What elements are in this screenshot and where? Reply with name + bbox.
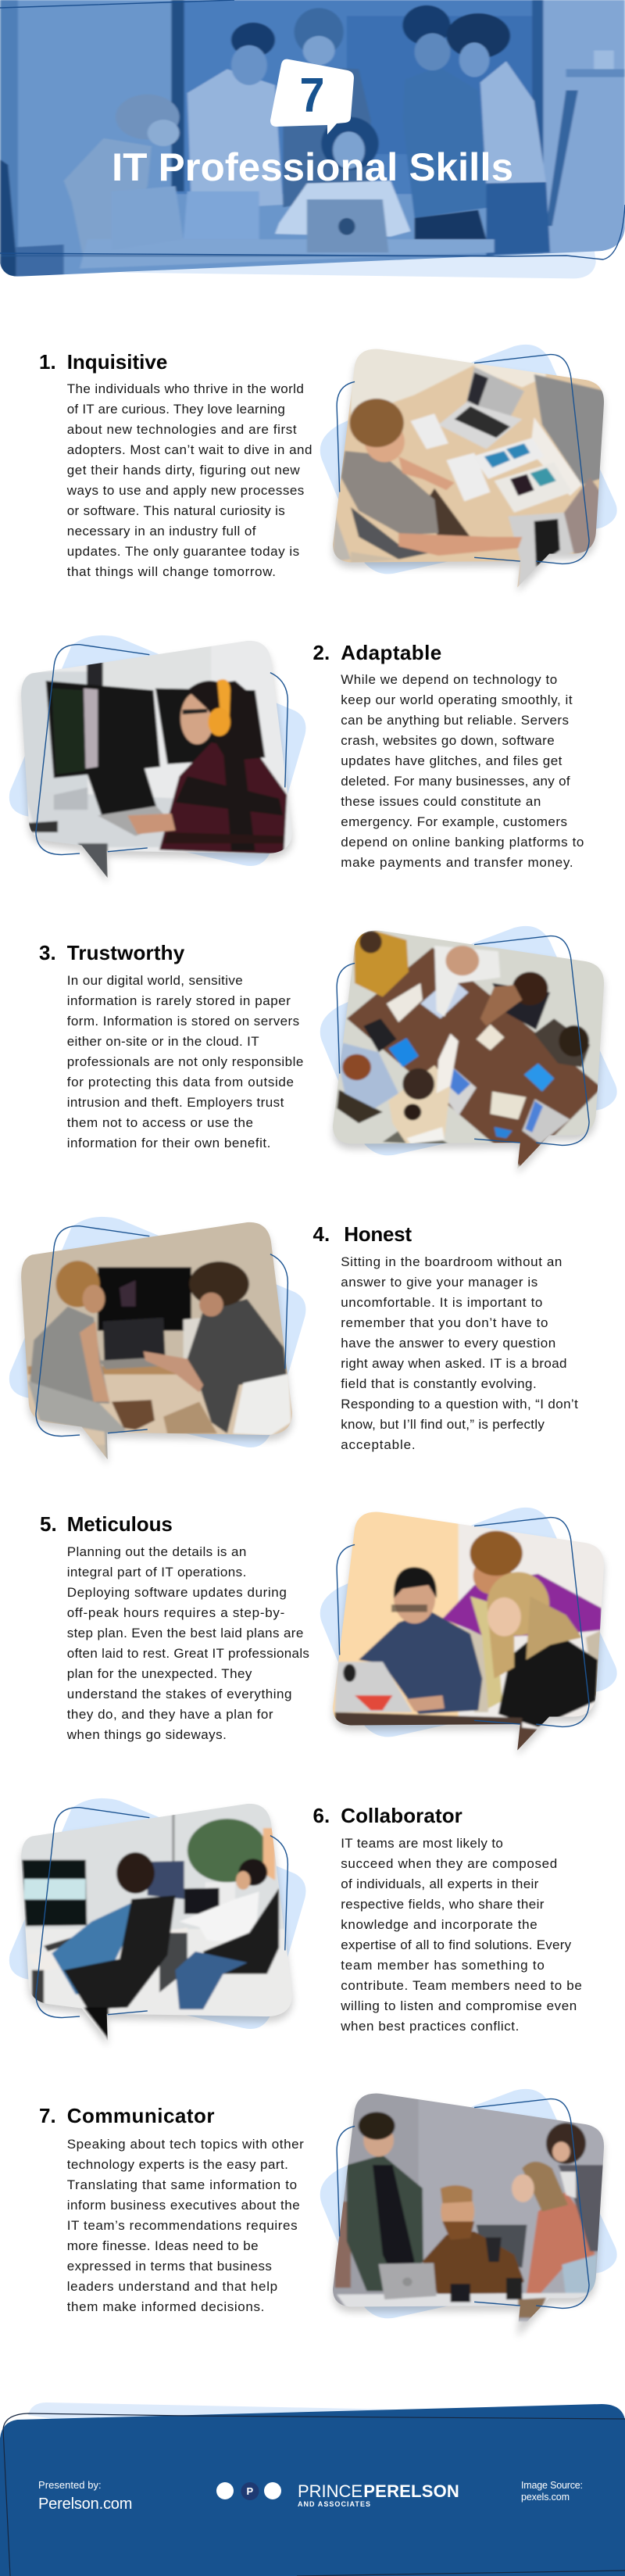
body 3: professionals are not only responsible xyxy=(67,1054,303,1069)
body 6 xyxy=(340,1836,582,2034)
body 2: can be anything but reliable. Servers xyxy=(341,713,569,728)
body 6: respective fields, who share their xyxy=(341,1897,545,1912)
logo: Prince Perelson and Associates xyxy=(216,2481,459,2508)
body 4: Sitting in the boardroom without an xyxy=(341,1254,562,1269)
body 7 xyxy=(67,2137,304,2314)
heading 2: Adaptable xyxy=(341,641,441,664)
body 3: information is rarely stored in paper xyxy=(67,993,291,1008)
body 7: technology experts is the easy part. xyxy=(67,2157,288,2172)
body 4: Responding to a question with, “I don’t xyxy=(341,1397,578,1411)
photo bubble 6 xyxy=(9,1798,305,2046)
body 2: emergency. For example, customers xyxy=(341,814,567,829)
heading 5: 5. xyxy=(40,1512,57,1536)
icon: number speech bubble: 7 xyxy=(300,69,325,123)
panel: 6 Collaborator xyxy=(9,1798,582,2046)
body 1: updates. The only guarantee today is xyxy=(67,544,299,559)
heading 5: Meticulous xyxy=(67,1512,173,1536)
body 5: often laid to rest. Great IT professionals xyxy=(67,1646,309,1661)
heading 4: 4. xyxy=(312,1222,330,1246)
body 5: Deploying software updates during xyxy=(67,1585,287,1600)
panel: 1 Inquisitive xyxy=(39,345,617,593)
heading 6: 6. xyxy=(312,1804,330,1827)
body 2: depend on online banking platforms to xyxy=(341,835,584,850)
body 3: for protecting this data from outside xyxy=(67,1075,294,1089)
body 4 xyxy=(341,1254,578,1452)
body 2: updates have glitches, and files get xyxy=(341,753,562,768)
photo bubble 2 xyxy=(9,634,305,883)
body 1 xyxy=(66,381,312,579)
body 1: ways to use and apply new processes xyxy=(66,483,304,498)
body 5: they do, and they have a plan for xyxy=(67,1707,273,1722)
body 1: or software. This natural curiosity is xyxy=(67,503,285,518)
body 7: inform business executives about the xyxy=(67,2198,300,2213)
panel: 7 Communicator xyxy=(39,2088,617,2337)
body 5: understand the stakes of everything xyxy=(67,1687,291,1701)
body 2: keep our world operating smoothly, it xyxy=(341,692,573,707)
body 5: step plan. Even the best laid plans are xyxy=(67,1626,303,1640)
body 6: willing to listen and compromise even xyxy=(340,1998,577,2013)
panel: 4 Honest xyxy=(9,1217,578,1467)
body 4: acceptable. xyxy=(341,1437,416,1452)
body 6: IT teams are most likely to xyxy=(341,1836,503,1851)
body 2: make payments and transfer money. xyxy=(341,855,573,870)
body 6: knowledge and incorporate the xyxy=(341,1917,538,1932)
body 5 xyxy=(66,1544,309,1742)
body 2: deleted. For many businesses, any of xyxy=(341,774,570,789)
icon: number speech bubble xyxy=(270,59,354,134)
body 3: information for their own benefit. xyxy=(67,1136,270,1150)
heading 1: Inquisitive xyxy=(67,350,167,374)
body 1: The individuals who thrive in the world xyxy=(67,381,304,396)
body 2 xyxy=(341,672,584,870)
panel: 5 Meticulous xyxy=(40,1507,617,1755)
body 7: IT team’s recommendations requires xyxy=(67,2218,298,2233)
presented by text: Presented by: xyxy=(38,2479,102,2491)
heading 7: 7. xyxy=(39,2104,56,2127)
heading 3: Trustworthy xyxy=(67,941,185,964)
body 4: uncomfortable. It is important to xyxy=(341,1295,542,1310)
body 3: form. Information is stored on servers xyxy=(67,1014,299,1029)
heading 3: 3. xyxy=(39,941,56,964)
body 4: right away when asked. IT is a broad xyxy=(341,1356,567,1371)
header banner xyxy=(0,0,625,282)
body 5: integral part of IT operations. xyxy=(67,1565,246,1580)
heading 2: 2. xyxy=(312,641,330,664)
body 7: Translating that same information to xyxy=(67,2177,297,2192)
body 6: succeed when they are composed xyxy=(341,1856,557,1871)
logo: Prince Perelson and Associates: P xyxy=(247,2485,253,2497)
presented by text xyxy=(38,2479,132,2513)
body 6: expertise of all to find solutions. Every xyxy=(341,1937,572,1952)
heading 6: Collaborator xyxy=(341,1804,462,1827)
presented by text: Perelson.com xyxy=(38,2496,132,2513)
body 7: leaders understand and that help xyxy=(67,2279,277,2294)
body 1: about new technologies and are first xyxy=(67,422,297,437)
photo bubble 3 xyxy=(320,925,617,1175)
body 6: contribute. Team members need to be xyxy=(341,1978,582,1993)
body 1: of IT are curious. They love learning xyxy=(67,402,285,417)
body 5: plan for the unexpected. They xyxy=(67,1666,252,1681)
photo bubble 7 xyxy=(320,2088,617,2337)
panel: 3 Trustworthy xyxy=(39,925,617,1175)
photo bubble 5 xyxy=(320,1507,617,1755)
body 3 xyxy=(67,973,303,1150)
body 3: In our digital world, sensitive xyxy=(67,973,243,988)
body 1: get their hands dirty, figuring out new xyxy=(67,463,300,478)
image source text: pexels.com xyxy=(521,2492,570,2503)
heading 1: 1. xyxy=(39,350,56,374)
footer light blue backing xyxy=(28,2402,438,2423)
logo: Prince Perelson and Associates: PRINCE xyxy=(298,2481,362,2501)
photo bubble 1 xyxy=(320,345,617,593)
image source text: Image Source: xyxy=(521,2480,583,2491)
body 4: field that is constantly evolving. xyxy=(341,1376,537,1391)
body 4: have the answer to every question xyxy=(341,1336,555,1351)
body 6: when best practices conflict. xyxy=(340,2019,519,2034)
body 4: answer to give your manager is xyxy=(341,1275,538,1290)
body 7: Speaking about tech topics with other xyxy=(67,2137,304,2152)
footer outline stroke xyxy=(3,2413,625,2576)
body 5: Planning out the details is an xyxy=(67,1544,246,1559)
body 6: team member has something to xyxy=(341,1958,545,1973)
body 3: either on-site or in the cloud. IT xyxy=(67,1034,259,1049)
body 1: adopters. Most can’t wait to dive in and xyxy=(67,442,312,457)
header team photo with blue overlay xyxy=(0,0,625,282)
body 3: intrusion and theft. Employers trust xyxy=(67,1095,284,1110)
body 4: remember that you don’t have to xyxy=(341,1315,548,1330)
title: IT Professional Skills xyxy=(112,145,513,189)
heading 4: Honest xyxy=(344,1222,412,1246)
header light blue backing xyxy=(120,247,596,278)
body 3: them not to access or use the xyxy=(67,1115,253,1130)
body 7: expressed in terms that business xyxy=(67,2259,272,2274)
logo: Prince Perelson and Associates: AND ASSOCIATES xyxy=(298,2500,370,2508)
logo: Prince Perelson and Associates: PERELSON xyxy=(363,2481,459,2501)
heading 7: Communicator xyxy=(67,2104,214,2127)
footer xyxy=(0,2402,625,2576)
image source text xyxy=(521,2480,583,2503)
body 5: off-peak hours requires a step-by- xyxy=(67,1605,284,1620)
body 2: these issues could constitute an xyxy=(341,794,541,809)
heading 4 xyxy=(312,1222,412,1246)
body 4: know, but I’ll find out,” is perfectly xyxy=(341,1417,545,1432)
photo bubble 4 xyxy=(9,1217,305,1467)
body 5: when things go sideways. xyxy=(66,1727,227,1742)
body 1: necessary in an industry full of xyxy=(67,524,256,538)
panel: 2 Adaptable xyxy=(9,634,584,883)
body 6: of individuals, all experts in their xyxy=(341,1877,539,1891)
body 7: them make informed decisions. xyxy=(67,2299,264,2314)
body 1: that things will change tomorrow. xyxy=(67,564,276,579)
body 2: crash, websites go down, software xyxy=(341,733,555,748)
body 2: While we depend on technology to xyxy=(341,672,557,687)
footer blue panel xyxy=(0,2404,625,2576)
header outline stroke xyxy=(0,0,625,259)
body 7: more finesse. Ideas need to be xyxy=(67,2238,259,2253)
